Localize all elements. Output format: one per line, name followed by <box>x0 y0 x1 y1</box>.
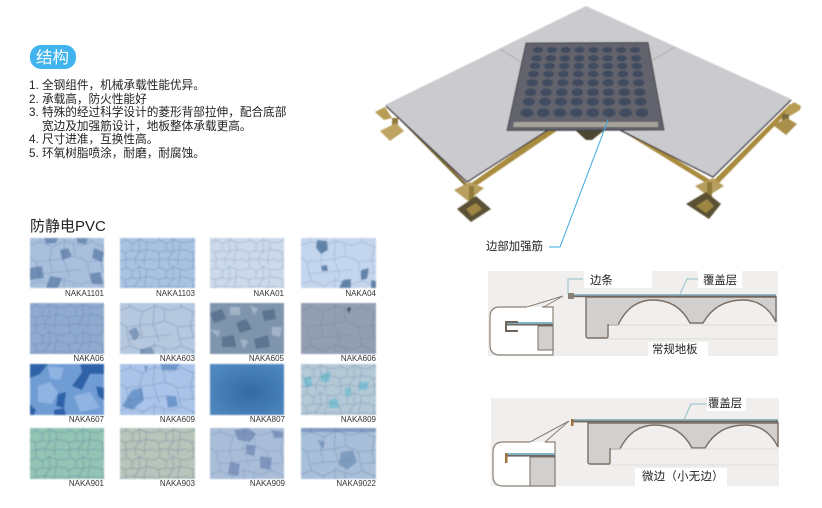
heading: 防静电PVC: 防静电PVC <box>30 218 106 235</box>
leader line <box>684 404 707 420</box>
swatch NAKA605 <box>209 302 285 355</box>
text block: feature list: 4. 尺寸进准，互换性高。 <box>29 132 158 146</box>
pedestal right corner <box>773 102 801 135</box>
leader lines <box>568 279 698 294</box>
label box and text: 常规地板: 常规地板 <box>652 342 698 356</box>
label NAKA807: NAKA807 <box>250 415 286 424</box>
label box and text: 覆盖层: 覆盖层 <box>708 396 742 410</box>
label NAKA01: NAKA01 <box>253 289 285 298</box>
swatch NAKA807 <box>209 363 285 416</box>
swatch NAKA607 <box>28 362 106 416</box>
label NAKA901: NAKA901 <box>69 479 105 488</box>
pedestal left corner <box>375 107 404 141</box>
label box and text: 微边（小无边） <box>635 468 727 486</box>
cover layer <box>568 293 776 299</box>
arrow: leader line to edge rib <box>549 120 608 247</box>
swatch NAKA01 <box>209 237 285 289</box>
floor tile surface <box>385 6 791 182</box>
label NAKA605: NAKA605 <box>249 354 285 363</box>
label NAKA809: NAKA809 <box>341 415 377 424</box>
label NAKA9022: NAKA9022 <box>336 479 377 488</box>
label NAKA04: NAKA04 <box>345 289 377 298</box>
text block: feature list: 宽边及加强筋设计，地板整体承载更高。 <box>42 119 252 133</box>
pedestal centre <box>574 129 606 140</box>
label NAKA606: NAKA606 <box>341 354 377 363</box>
inset detail <box>490 307 553 355</box>
swatch NAKA901 <box>29 427 105 480</box>
floor lines <box>610 449 778 465</box>
heading pill: 结构: 结构 <box>36 48 69 67</box>
label NAKA903: NAKA903 <box>160 479 196 488</box>
label NAKA603: NAKA603 <box>160 354 196 363</box>
swatch NAKA9022 <box>300 427 377 480</box>
diagram background <box>488 271 778 356</box>
swatch NAKA603 <box>119 302 196 355</box>
floor lines <box>608 325 776 339</box>
label box and text: 微边（小无边）: 微边（小无边） <box>642 469 724 483</box>
tile seams <box>500 47 675 62</box>
panel cross-section <box>588 423 778 464</box>
text block: feature list <box>29 78 287 160</box>
swatch NAKA04 <box>300 237 377 289</box>
gold support beams <box>390 104 794 187</box>
cover layer with micro edge <box>571 419 778 426</box>
text block: feature list: 3. 特殊的经过科学设计的菱形背部拉伸，配合底部 <box>29 105 287 119</box>
text block: feature list: 5. 环氧树脂喷涂，耐磨，耐腐蚀。 <box>29 146 205 160</box>
label box and text: 覆盖层 <box>698 271 742 288</box>
label box and text: 边条: 边条 <box>590 273 613 287</box>
diagram: 常规地板 <box>488 271 778 356</box>
caption: 边部加强筋: 边部加强筋 <box>486 239 543 253</box>
floor assembly photo <box>375 6 801 222</box>
dimples <box>521 47 648 117</box>
heading pill: 结构 <box>30 45 76 69</box>
inset detail <box>493 442 555 486</box>
swatch NAKA1103 <box>119 237 196 289</box>
diagram background <box>491 398 779 486</box>
label NAKA1101: NAKA1101 <box>65 289 105 298</box>
swatch NAKA609 <box>119 363 196 416</box>
label NAKA607: NAKA607 <box>69 415 105 424</box>
label box and text: 常规地板 <box>648 342 708 356</box>
swatch NAKA809 <box>300 363 377 416</box>
swatch NAKA06 <box>29 302 105 355</box>
label box and text: 边条 <box>584 271 652 288</box>
label NAKA06: NAKA06 <box>73 354 105 363</box>
text block: feature list: 1. 全钢组件，机械承载性能优异。 <box>29 78 205 92</box>
swatch NAKA1101 <box>29 237 105 289</box>
label NAKA609: NAKA609 <box>160 415 196 424</box>
swatch NAKA903 <box>119 427 196 480</box>
pedestal front right <box>686 178 724 219</box>
diagram: 微边（小无边） <box>491 396 779 486</box>
callout wedge <box>527 296 563 308</box>
panel cross-section <box>586 297 776 338</box>
pedestal front left <box>454 182 491 222</box>
swatch NAKA606 <box>300 302 377 355</box>
label NAKA909: NAKA909 <box>250 479 286 488</box>
tile dark edges <box>386 100 791 182</box>
callout wedge <box>530 421 569 442</box>
swatch NAKA909 <box>209 427 285 480</box>
text block: feature list: 2. 承载高，防火性能好 <box>29 92 147 106</box>
swatch grid <box>30 238 377 488</box>
label NAKA1103: NAKA1103 <box>156 289 196 298</box>
raised panel underside <box>507 42 664 130</box>
label box and text: 覆盖层: 覆盖层 <box>703 273 737 287</box>
